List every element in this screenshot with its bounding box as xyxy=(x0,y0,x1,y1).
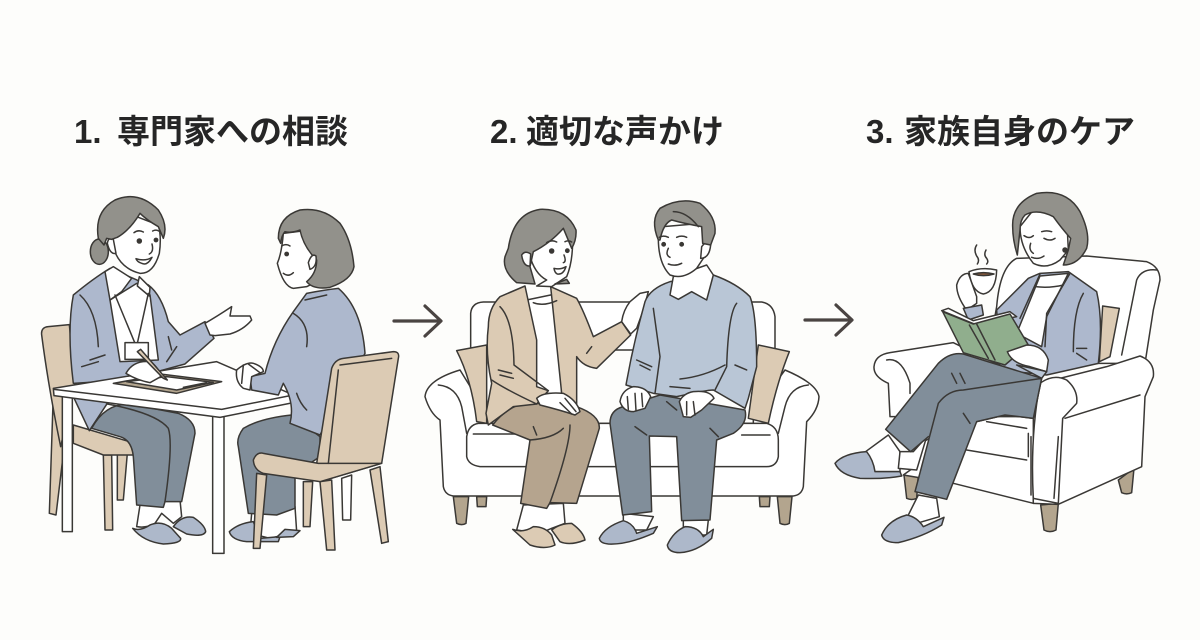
clipboard and pen xyxy=(113,374,222,393)
counsellor's writing hand xyxy=(126,349,167,383)
heading: step 1: 専門家への相談 xyxy=(117,113,348,150)
armchair legs xyxy=(904,468,1134,532)
scene 1: consultation with a specialist xyxy=(42,197,399,553)
heading: step 3: 家族自身のケア xyxy=(904,113,1135,150)
counsellor's chair xyxy=(42,325,135,530)
cardigan and shirt xyxy=(997,272,1100,375)
near leg and slipper xyxy=(882,373,1042,543)
gesturing hand xyxy=(205,307,252,336)
arrow 2 xyxy=(805,305,852,335)
head xyxy=(1013,192,1088,266)
counsellor's legs and slippers xyxy=(92,404,206,544)
counsellor's cardigan xyxy=(70,267,214,431)
sleeve end xyxy=(1017,365,1047,378)
client's cardigan xyxy=(236,288,365,435)
man's sweater xyxy=(626,275,757,408)
man's legs and slippers xyxy=(599,395,746,553)
scene 3: caring for oneself with a book and tea xyxy=(835,192,1160,543)
sofa pillows xyxy=(457,345,789,423)
far leg and slipper xyxy=(835,354,1042,479)
heading: step 2: 適切な声かけ xyxy=(526,113,724,150)
cushion xyxy=(1099,306,1119,362)
sofa legs xyxy=(453,497,792,525)
sofa xyxy=(425,302,819,496)
open book xyxy=(942,308,1028,365)
heading: step 1: 1. xyxy=(74,113,102,150)
heading: step 2: 2. xyxy=(490,113,518,150)
table top xyxy=(53,362,293,417)
man's hands xyxy=(620,387,714,417)
client's head xyxy=(277,209,354,288)
client's legs and slippers xyxy=(229,415,320,542)
woman's hands xyxy=(537,292,648,415)
armchair xyxy=(874,256,1160,504)
woman's legs and slippers xyxy=(493,403,599,547)
woman's cardigan and shirt xyxy=(486,286,631,425)
hand on book xyxy=(1007,345,1048,372)
man's head xyxy=(655,201,715,300)
scene 2: speaking kindly on the sofa xyxy=(425,201,819,553)
arrow 1 xyxy=(394,306,441,336)
client's chair xyxy=(253,352,399,550)
sleeve at the book xyxy=(963,305,983,320)
counsellor's head xyxy=(90,197,165,273)
table legs xyxy=(62,395,224,553)
cup with steam xyxy=(957,245,997,310)
heading: step 3: 3. xyxy=(866,113,894,150)
woman's head xyxy=(504,209,576,287)
